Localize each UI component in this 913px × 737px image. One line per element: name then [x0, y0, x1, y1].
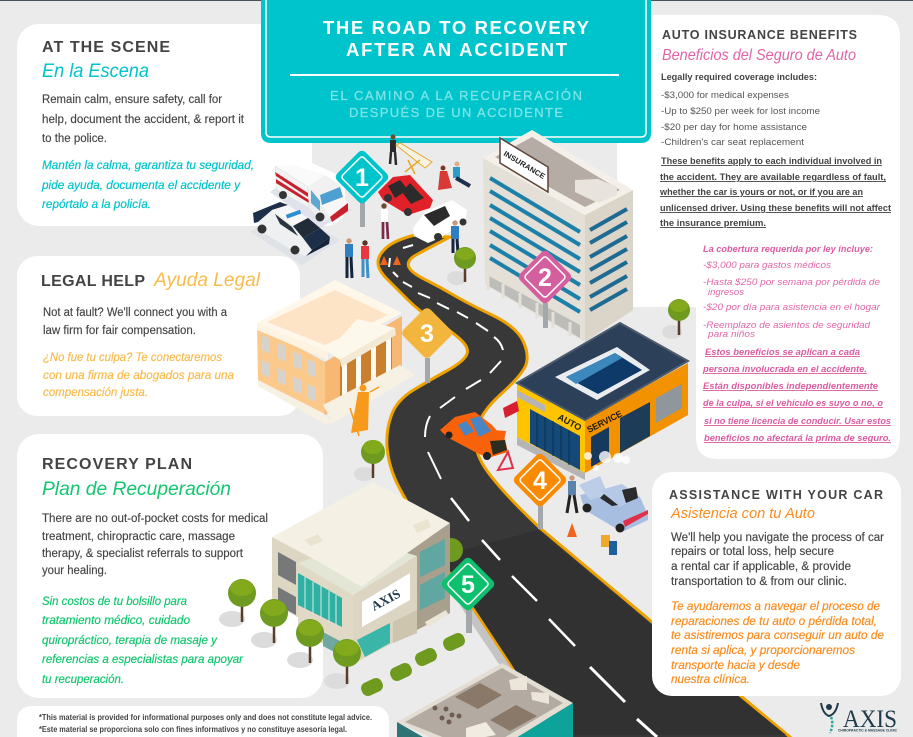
text block: spanish [41, 160, 254, 211]
text block: english: Remain calm, ensure safety, call for [42, 94, 222, 106]
text block: spanish: renta si aplica, y proporcionaremos [671, 645, 855, 657]
text block: spanish: nuestra clínica. [671, 674, 750, 686]
text block: english: There are no out-of-pocket costs for medical [42, 513, 268, 525]
text block: spanish coverage: de la culpa, si el vehículo es suyo o no, o [703, 398, 884, 408]
white car [413, 200, 467, 243]
panel: disclaimer [17, 706, 389, 737]
illustration: mechanic and blue car [567, 475, 648, 555]
subheading: beneficios del seguro de auto: Beneficios del Seguro de Auto [662, 47, 856, 64]
text block: spanish: con una firma de abogados para una [43, 370, 234, 382]
title english [323, 17, 590, 60]
title spanish [330, 88, 582, 120]
illustration: accident scene vehicles and people [250, 134, 470, 278]
red car [378, 175, 433, 216]
text block: english: transportation to & from our clinic. [671, 576, 847, 588]
panel: recovery plan [17, 434, 323, 698]
title english: AFTER AN ACCIDENT [346, 39, 568, 60]
text block: english [42, 513, 268, 577]
text block: spanish: transporte hacia y desde [671, 660, 800, 672]
woman [361, 240, 369, 278]
text block: english coverage: -$3,000 for medical expenses [661, 90, 790, 100]
text block: spanish: ¿No fue tu culpa? Te conectaremos [43, 352, 222, 364]
paramedic with stretcher [390, 134, 432, 174]
police officer [345, 238, 353, 278]
text block: english: repairs or total loss, help secure [671, 546, 834, 558]
skylight [555, 347, 650, 400]
text block: spanish coverage: -Hasta $250 por semana por pérdida de [703, 277, 880, 287]
sign 4: 4 [533, 467, 547, 495]
title banner [261, 0, 651, 143]
logo: axis chiropractic and massage clinic: AXIS [843, 706, 897, 733]
ambulance [270, 165, 352, 228]
text block: english coverage: These benefits apply to each individual involved in [661, 156, 882, 166]
logo: axis chiropractic and massage clinic: CHIROPRACTIC & MASSAGE CLINIC [838, 728, 897, 732]
billboard [500, 138, 548, 192]
sign 2: 2 [538, 264, 552, 292]
title spanish: DESPUÉS DE UN ACCIDENTE [349, 105, 563, 120]
heading: at the scene: AT THE SCENE [42, 39, 170, 56]
smoke [584, 451, 630, 471]
axis sign on building: AXIS [368, 586, 403, 614]
panel: assistance with your car [652, 472, 901, 696]
sign 1: 1 [355, 164, 369, 192]
trees and hedges in front of the clinic [219, 579, 467, 698]
illustration: broken down orange car [440, 401, 519, 470]
text block: spanish [43, 352, 234, 399]
text block: spanish [671, 601, 884, 686]
text block: english coverage: whether the car is yours or not, or if you are an [659, 187, 863, 197]
text block: spanish: pide ayuda, documenta el accidente y [41, 180, 241, 192]
panel: at the scene [17, 24, 640, 300]
illustration: insurance building [483, 130, 633, 342]
heading: legal help: LEGAL HELP [41, 273, 145, 290]
text block: english: to the police. [42, 133, 107, 145]
text block: english: law firm for fair compensation. [43, 325, 196, 337]
statue of justice [350, 384, 379, 436]
text block: spanish: quiropráctico, terapia de masaje y [42, 635, 218, 647]
shop sign text: SERVICE [585, 409, 624, 435]
sign 3 [400, 306, 454, 383]
sign 3: 3 [420, 320, 434, 348]
illustration: axis clinic building [272, 482, 450, 664]
subheading: ayuda legal: Ayuda Legal [153, 270, 261, 291]
illustration: courthouse [257, 280, 415, 436]
police car [250, 202, 340, 265]
billboard: INSURANCE [502, 149, 547, 181]
text block: spanish [42, 596, 244, 686]
panel: legal help [17, 256, 300, 416]
illustration: auto service shop [517, 323, 688, 480]
text block: english: We'll help you navigate the process of car [671, 532, 884, 544]
text block: spanish coverage: La cobertura requerida por ley incluye: [703, 244, 873, 254]
text block: spanish coverage: Estos beneficios se aplican a cada [705, 347, 860, 357]
sign 5: 5 [461, 571, 475, 599]
text block: spanish: compensación justa. [43, 387, 148, 399]
text block: spanish coverage: para niños [707, 329, 756, 339]
text block: spanish: te asistiremos para conseguir un auto de [671, 630, 884, 642]
sign 1 [334, 149, 390, 227]
text block: english coverage: -$20 per day for home assistance [661, 122, 807, 132]
text block: english [42, 94, 245, 145]
subheading: plan de recuperacion: Plan de Recuperación [42, 479, 231, 500]
heading: assistance with your car: ASSISTANCE WITH YOUR CAR [669, 488, 883, 502]
text block: spanish coverage: -$3,000 para gastos médicos [703, 260, 832, 270]
traffic cones [380, 256, 401, 265]
text block: english coverage: the accident. They are available regardless of fault, [660, 172, 886, 182]
text block: spanish coverage: Están disponibles independientemente [703, 381, 878, 391]
subheading: asistencia con tu auto: Asistencia con tu Auto [670, 506, 815, 522]
text block: english coverage: Legally required coverage includes: [661, 72, 817, 82]
text block: english [671, 532, 884, 588]
text block: english: a rental car if applicable, & provide [671, 561, 851, 573]
text block: english coverage: -Children's car seat replacement [661, 137, 805, 147]
text block: spanish: referencias a especialistas para apoyar [42, 654, 244, 666]
heading: auto insurance benefits: AUTO INSURANCE BENEFITS [662, 28, 857, 42]
first aid figures [438, 162, 470, 190]
text block: spanish: tratamiento médico, cuidado [42, 615, 191, 627]
heading: recovery plan: RECOVERY PLAN [42, 456, 192, 473]
text block: spanish: Te ayudaremos a navegar el proceso de [671, 601, 880, 613]
text block: spanish coverage: beneficios no afectará la prima de seguro. [704, 433, 891, 443]
text block: spanish: Mantén la calma, garantiza tu seguridad, [42, 160, 254, 172]
logo: axis chiropractic and massage clinic [821, 703, 897, 733]
text block: english coverage: -Up to $250 per week for lost income [661, 106, 820, 116]
text block: spanish: reparaciones de tu auto o pérdida total, [671, 616, 877, 628]
police officer right [451, 220, 459, 253]
text block: spanish: tu recuperación. [42, 674, 124, 686]
text block: spanish coverage: ingresos [708, 287, 745, 297]
axis sign on building [362, 573, 410, 627]
subheading: en la escena: En la Escena [42, 61, 149, 82]
text block: spanish coverage: si no tiene licencia de conducir. Usar estos [704, 416, 891, 426]
shop sign text: AUTO [556, 412, 583, 433]
text block: english: help, document the accident, & report it [42, 114, 245, 126]
text block: english: treatment, chiropractic care, massage [42, 531, 235, 543]
text block: english: Not at fault? We'll connect you with a [43, 307, 228, 319]
text block: spanish coverage: persona involucrada en el accidente. [702, 364, 867, 374]
panel: disclaimer: *Este material se proporciona solo con fines informativos y no constituye asesoría legal. [39, 725, 347, 734]
text block: english: therapy, & specialist referrals to support [42, 548, 244, 560]
text block: english [43, 307, 228, 337]
text block: spanish coverage [702, 244, 891, 443]
text block: english: your healing. [42, 565, 107, 577]
text block: spanish coverage: -$20 por día para asistencia en el hogar [703, 302, 881, 312]
panel: auto insurance benefits [617, 15, 900, 459]
text block: english coverage [659, 72, 891, 228]
title spanish: EL CAMINO A LA RECUPERACIÓN [330, 88, 582, 103]
text block: english coverage: unlicensed driver. Using these benefits will not affect [660, 203, 891, 213]
sign 5 [440, 556, 496, 633]
shop sign text [556, 409, 624, 435]
trees behind the clinic [354, 247, 690, 562]
title english: THE ROAD TO RECOVERY [323, 17, 590, 38]
road [378, 235, 800, 737]
sign 2 [517, 249, 573, 328]
text block: spanish coverage: -Reemplazo de asientos de seguridad [703, 320, 871, 330]
bystander [381, 203, 388, 239]
sign 4 [512, 452, 568, 529]
panel: disclaimer: *This material is provided for informational purposes only and does not constitute legal advice. [39, 713, 372, 722]
text block: spanish: Sin costos de tu bolsillo para [42, 596, 187, 608]
illustration: parking building at the bottom [397, 663, 573, 737]
text block: spanish: repórtalo a la policía. [42, 199, 151, 211]
text block: english coverage: the insurance premium. [660, 218, 766, 228]
